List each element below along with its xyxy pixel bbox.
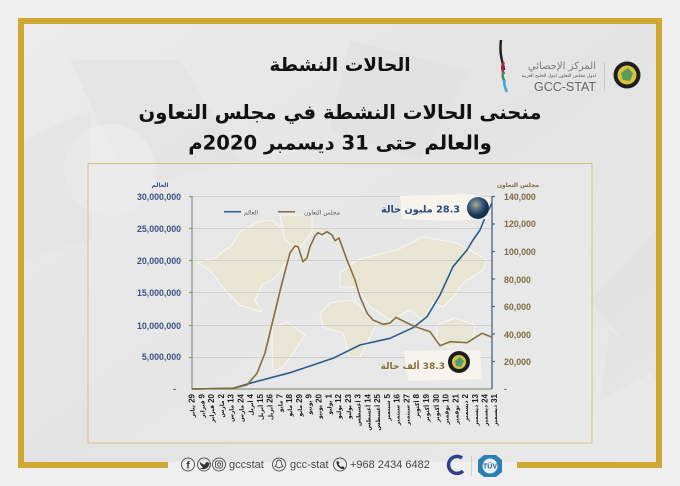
x axis date labels: 26 أبريل [266,393,275,420]
callout: GCC [381,350,482,381]
x axis date labels: 20 يونيو [314,393,324,420]
x axis date labels: 3 أغسطس [354,393,363,426]
left axis labels: 10,000,000 [137,321,181,331]
x axis date labels: 9 يونيو [305,393,314,415]
footer contact bar [182,455,502,477]
legend: مجلس التعاون [304,210,340,216]
icon: TUV badge [478,455,502,477]
legend: العالم [244,210,258,216]
contact text: gccstat [229,459,264,471]
right axis labels: 60,000 [504,302,531,312]
icon: glyphs [186,460,344,472]
right axis labels: - [504,384,507,394]
title: الحالات النشطة [269,55,411,76]
x axis date labels: 23 يوليو [344,393,353,420]
contact text: gcc-stat [290,459,329,471]
GCC curve [192,232,492,389]
logo: GCC-STAT: GCC-STAT [534,80,596,94]
x axis date labels: 9 فبراير [197,393,206,419]
legend [224,210,340,216]
right axis labels: 80,000 [504,275,531,285]
subtitle [139,101,541,154]
left axis labels: 25,000,000 [137,224,181,234]
x axis date labels: 27 سبتمبر [402,393,411,426]
icon: glyphs: f [186,460,190,472]
world map [197,215,487,372]
callout: GCC: 38.3 ألف حالة [381,360,445,372]
icon: TUV badge: TÜV [483,462,497,470]
callout: world [381,194,490,221]
left axis [189,196,492,389]
x axis date labels: 21 نوفمبر [451,393,460,425]
x axis date labels: 2 ديسمبر [461,393,470,422]
x axis date labels: 29 مايو [295,393,304,418]
right axis labels: 120,000 [504,219,536,229]
x axis date labels: 16 سبتمبر [393,393,402,426]
x axis date labels: 18 مايو [285,393,294,418]
x axis date labels: 14 أغسطس [363,393,372,431]
icon: GCC emblem [614,62,640,88]
world curve [192,203,492,389]
x axis date labels: 19 أكتوبر [422,393,431,423]
x axis date labels: 30 أكتوبر [432,393,441,423]
contact text: +968 2434 6482 [350,459,430,471]
left axis labels: 5,000,000 [142,352,181,362]
x axis date labels: 1 يوليو [324,393,333,415]
x axis date labels: 5 سبتمبر [383,393,392,422]
left axis labels: 15,000,000 [137,288,181,298]
logo: GCC-STAT: المركز الإحصائي [528,61,596,72]
x axis date labels: 2 مارس [217,393,226,418]
left axis labels [137,192,181,394]
x axis date labels [188,393,499,431]
subtitle: والعالم حتى 31 ديسمبر 2020م [188,132,492,154]
x axis date labels: 13 ديسمبر [471,393,480,427]
x axis date labels: 20 فبراير [207,393,216,423]
x axis date labels: 31 ديسمبر [490,393,499,427]
right axis [492,196,495,389]
icon: social media [182,458,346,471]
right axis labels [504,192,536,394]
logo: GCC-STAT: لدول مجلس التعاون لدول الخليج العربية [521,74,596,79]
x axis date labels: 15 أبريل [256,393,265,420]
x axis date labels: 24 ديسمبر [481,393,490,427]
chart panel [88,164,592,443]
x axis date labels: 25 أغسطس [373,393,382,431]
right axis labels: 140,000 [504,192,536,202]
x axis date labels: 24 مارس [236,393,245,422]
x axis date labels: 4 أبريل [246,393,255,416]
x axis date labels: 7 مايو [275,393,284,413]
left axis title: العالم [152,182,168,189]
x axis date labels: 29 يناير [188,393,196,418]
grid lines [192,196,492,358]
callout: world: 28.3 مليون حالة [381,204,460,216]
icon: certification C [449,456,463,473]
right axis labels: 40,000 [504,330,531,340]
x axis date labels: 13 مارس [227,393,236,422]
left axis labels: 20,000,000 [137,256,181,266]
subtitle: منحنى الحالات النشطة في مجلس التعاون [139,101,541,124]
right axis title: مجلس التعاون [497,182,539,189]
x axis date labels: 10 نوفمبر [442,393,450,425]
left axis labels: - [173,384,176,394]
x axis date labels: 12 يوليو [334,393,343,420]
right axis labels: 100,000 [504,247,536,257]
left axis labels: 30,000,000 [137,192,181,202]
right axis labels: 20,000 [504,357,531,367]
logo: GCC-STAT [500,40,605,94]
x axis date labels: 8 أكتوبر [412,393,421,419]
contact text [229,459,430,471]
